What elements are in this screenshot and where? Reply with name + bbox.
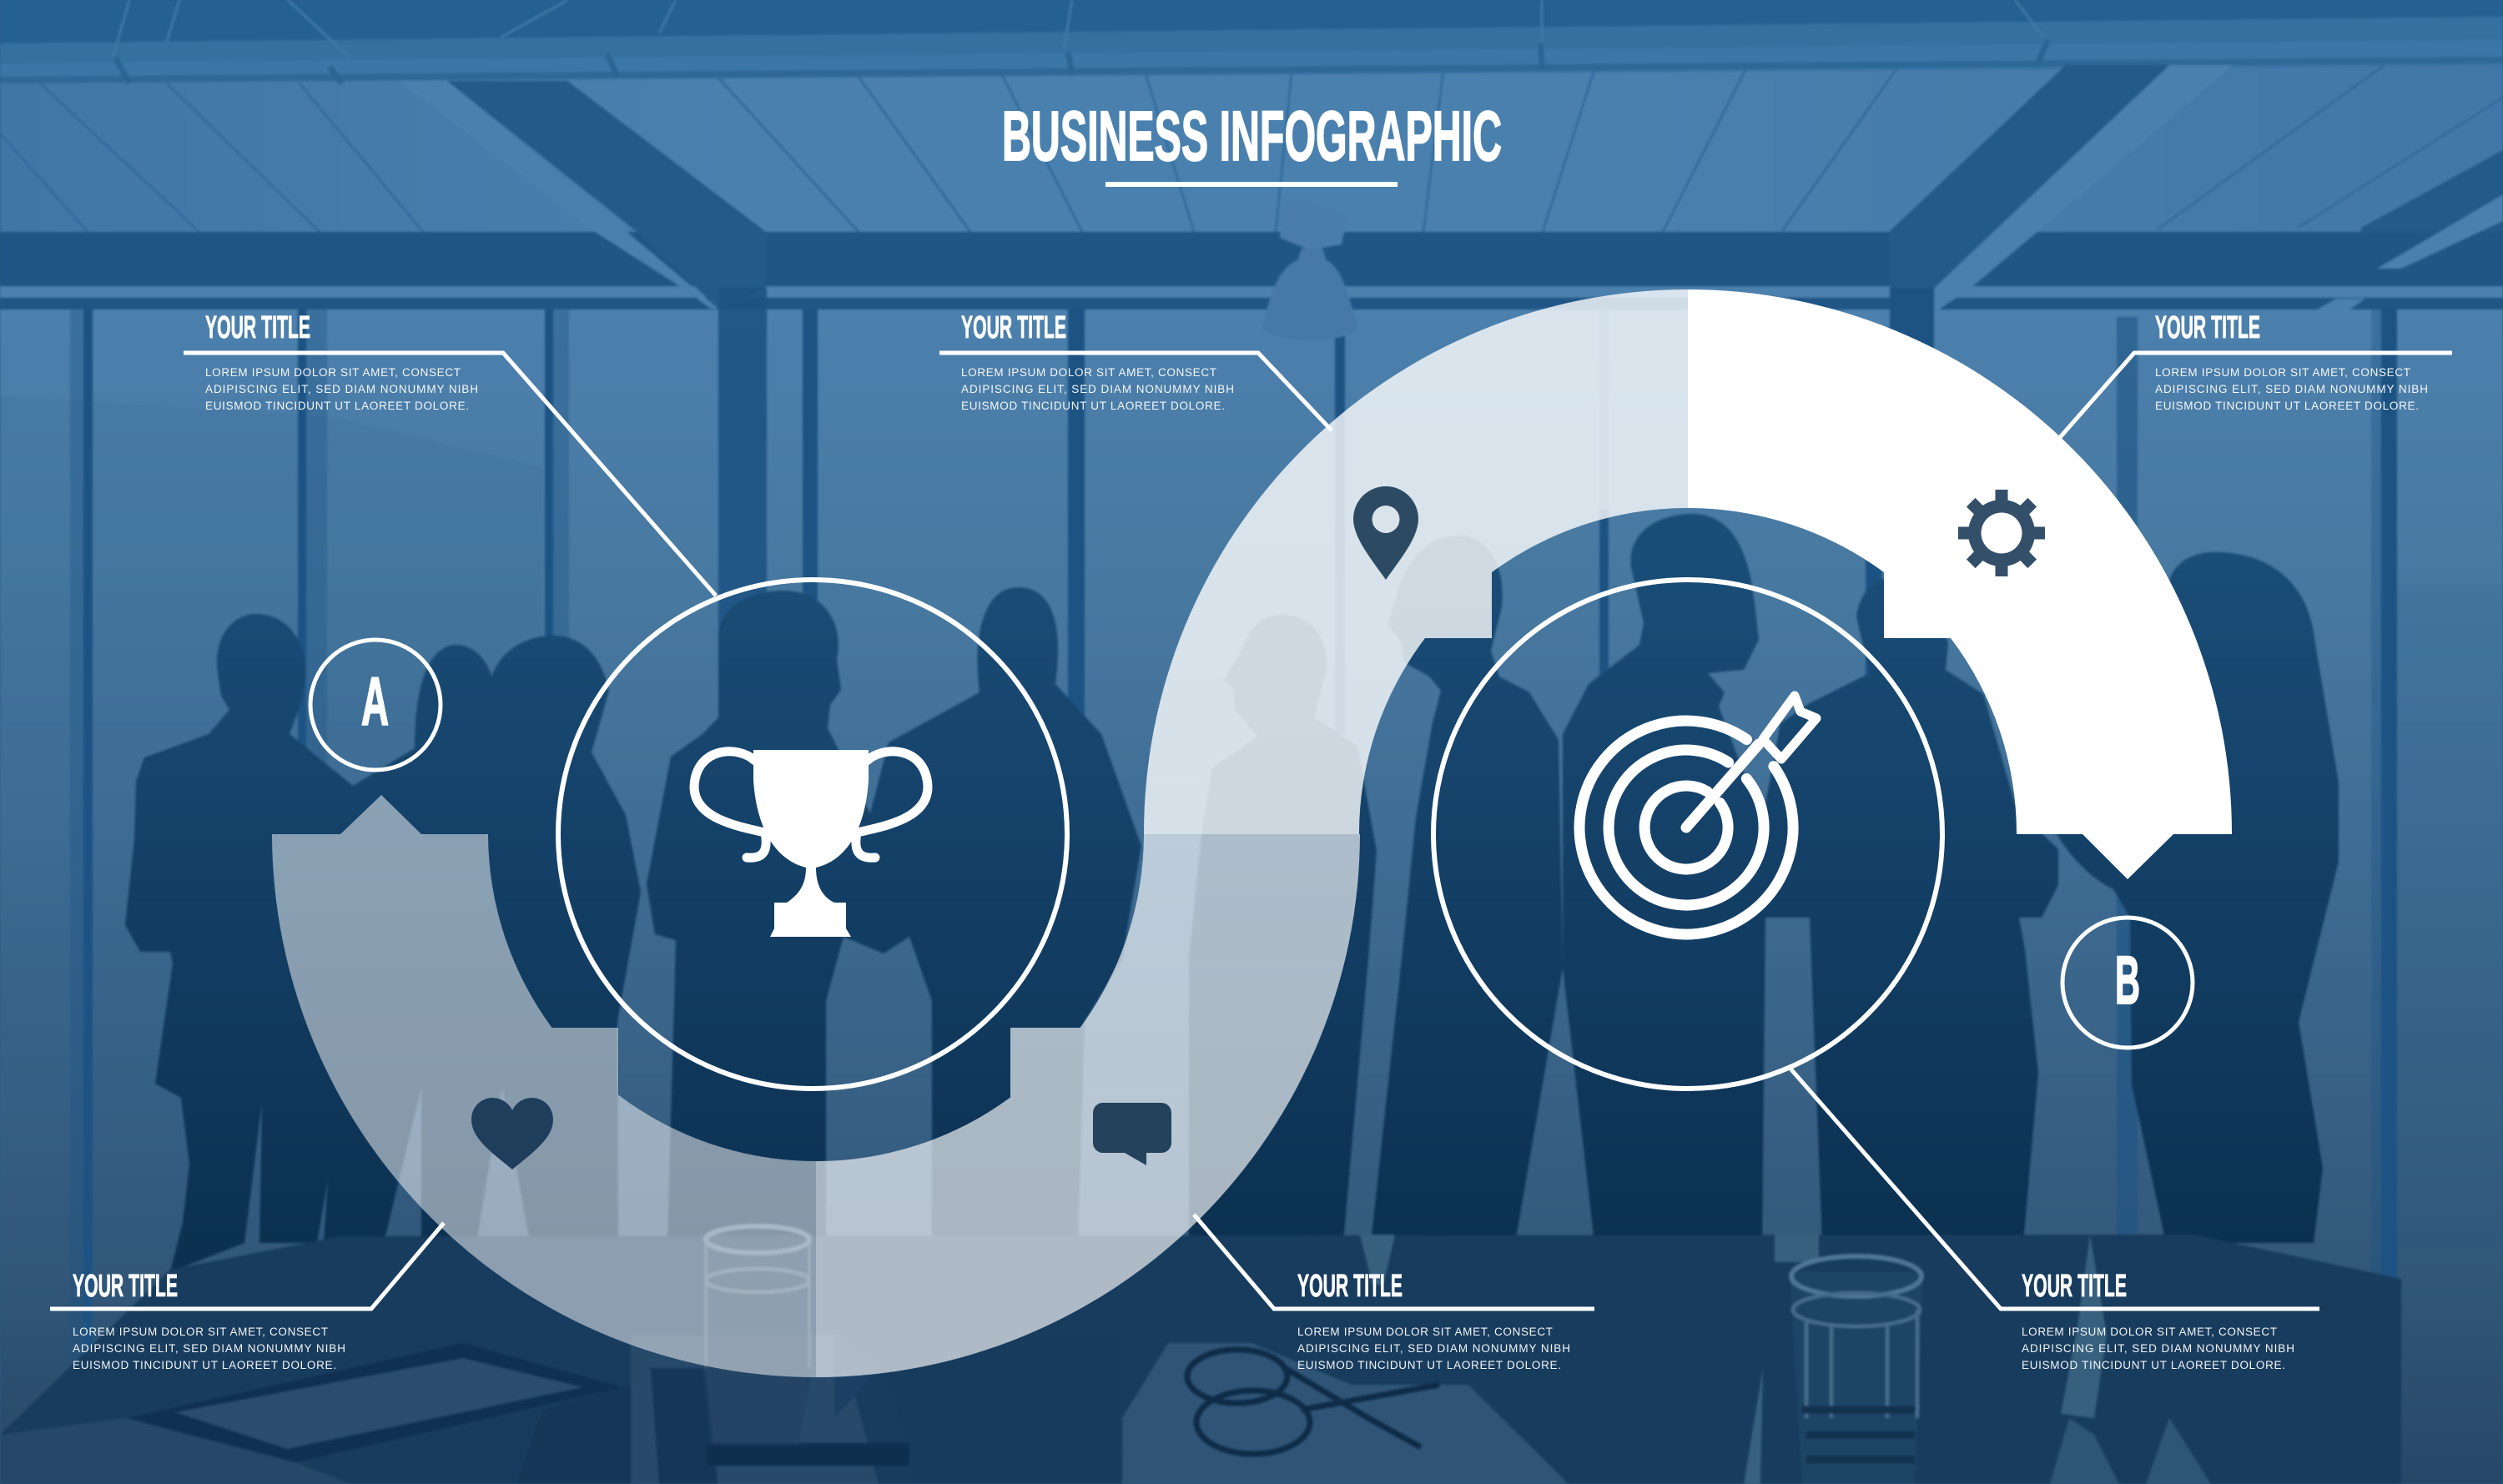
label circle A: A — [361, 664, 389, 740]
text block: bottom right: EUISMOD TINCIDUNT UT LAOREET DOLORE. — [2022, 1359, 2285, 1371]
text block: top right: EUISMOD TINCIDUNT UT LAOREET DOLORE. — [2155, 400, 2419, 412]
text block: top right: LOREM IPSUM DOLOR SIT AMET, CONSECT — [2155, 366, 2410, 379]
text block: top middle: ADIPISCING ELIT, SED DIAM NONUMMY NIBH — [961, 383, 1234, 395]
text block: top left: EUISMOD TINCIDUNT UT LAOREET DOLORE. — [205, 400, 469, 412]
callout line: bottom left — [50, 1223, 444, 1309]
text block: top middle: LOREM IPSUM DOLOR SIT AMET, CONSECT — [961, 366, 1216, 379]
left water glass — [703, 1235, 812, 1446]
ribbon segment: upper left — [1144, 289, 1688, 834]
table — [0, 1235, 2401, 1484]
text block: bottom right: YOUR TITLE — [2022, 1269, 2127, 1304]
large circle: target — [1433, 580, 1942, 1089]
callout line: top middle — [939, 353, 1332, 430]
large circle: trophy — [558, 580, 1067, 1089]
title — [1002, 97, 1502, 187]
icon: target with arrow — [1579, 696, 1816, 934]
text block: top right: YOUR TITLE — [2155, 310, 2260, 345]
text block: top right: ADIPISCING ELIT, SED DIAM NONUMMY NIBH — [2155, 383, 2428, 395]
icon: map pin — [1353, 486, 1418, 580]
ribbon segment: lower right — [816, 834, 1360, 1377]
silhouettes — [125, 514, 2339, 1272]
text block: top left: ADIPISCING ELIT, SED DIAM NONUMMY NIBH — [205, 383, 478, 395]
label circle B — [2062, 918, 2193, 1048]
text block: bottom left: EUISMOD TINCIDUNT UT LAOREET DOLORE. — [73, 1359, 336, 1371]
ribbon segment: lower left — [272, 795, 816, 1377]
label circle B: B — [2115, 943, 2140, 1019]
text block: top left: LOREM IPSUM DOLOR SIT AMET, CONSECT — [205, 366, 461, 379]
text block: bottom left — [73, 1269, 345, 1371]
ribbon segment: upper right — [1688, 289, 2232, 879]
right water glass — [1790, 1272, 1923, 1484]
callout line: bottom right — [1790, 1068, 2319, 1309]
text block: bottom middle: YOUR TITLE — [1297, 1269, 1403, 1304]
text block: bottom middle: ADIPISCING ELIT, SED DIAM NONUMMY NIBH — [1297, 1342, 1570, 1355]
text block: top right — [2155, 310, 2428, 412]
text block: bottom middle: LOREM IPSUM DOLOR SIT AMET, CONSECT — [1297, 1326, 1553, 1338]
label circle A — [310, 640, 441, 770]
icon: trophy — [694, 750, 928, 937]
text block: top left — [205, 310, 478, 412]
text block: bottom middle — [1297, 1269, 1570, 1371]
callout line: top right — [2056, 353, 2452, 442]
text block: bottom middle: EUISMOD TINCIDUNT UT LAOREET DOLORE. — [1297, 1359, 1561, 1371]
icon: gear — [1958, 490, 2045, 576]
callout line: top left — [184, 353, 716, 596]
icon: speech bubble — [1093, 1103, 1171, 1165]
text block: bottom left: LOREM IPSUM DOLOR SIT AMET, CONSECT — [73, 1326, 328, 1338]
icon: heart — [471, 1098, 553, 1170]
text block: bottom right: ADIPISCING ELIT, SED DIAM NONUMMY NIBH — [2022, 1342, 2294, 1355]
title: BUSINESS INFOGRAPHIC — [1002, 97, 1502, 175]
text block: bottom right — [2022, 1269, 2294, 1371]
text block: top middle: EUISMOD TINCIDUNT UT LAOREET DOLORE. — [961, 400, 1225, 412]
window frames — [70, 288, 2397, 1435]
text block: bottom left: YOUR TITLE — [73, 1269, 178, 1304]
text block: bottom right: LOREM IPSUM DOLOR SIT AMET, CONSECT — [2022, 1326, 2277, 1338]
callout line: bottom middle — [1194, 1215, 1594, 1309]
text block: bottom left: ADIPISCING ELIT, SED DIAM NONUMMY NIBH — [73, 1342, 345, 1355]
curved ribbon — [272, 289, 2232, 1377]
eyeglasses on table — [1187, 1350, 1439, 1454]
ceiling lamp — [1280, 199, 1347, 250]
text block: top left: YOUR TITLE — [205, 310, 310, 345]
text block: top middle: YOUR TITLE — [961, 310, 1066, 345]
text block: top middle — [961, 310, 1234, 412]
dark object — [707, 1443, 909, 1466]
